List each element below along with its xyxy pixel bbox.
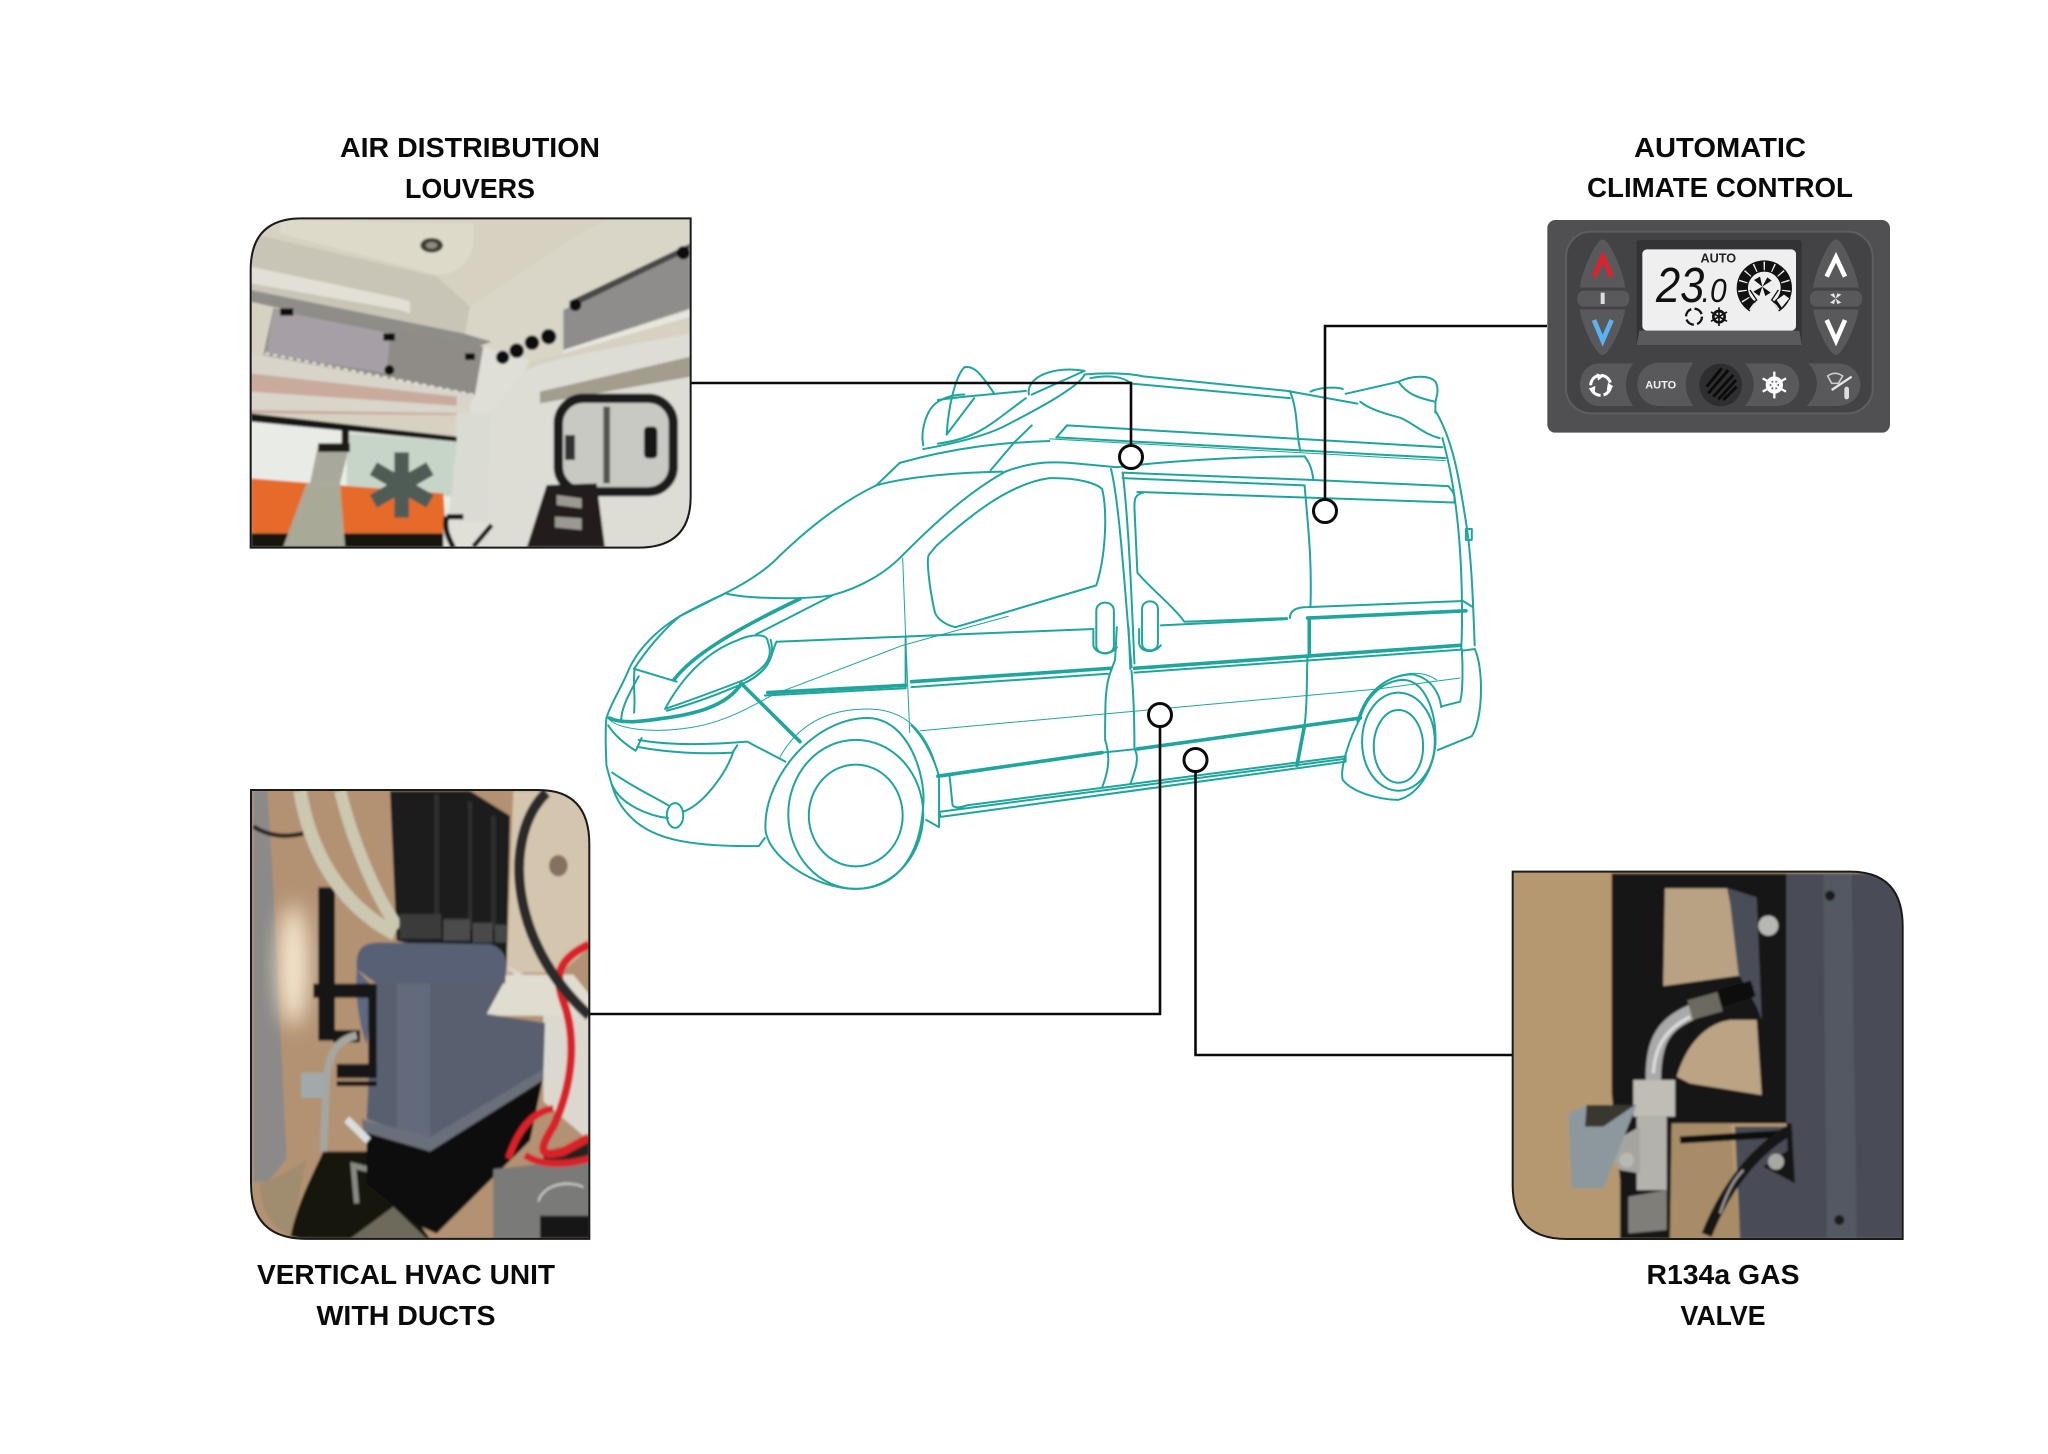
heading: vertical HVAC unit with ducts: WITH DUCTS xyxy=(316,1300,496,1331)
connector: climate control to van xyxy=(1314,326,1547,522)
van rear wheel xyxy=(1342,674,1441,800)
heading: R134a gas valve xyxy=(1646,1259,1800,1331)
connector: HVAC unit to van xyxy=(589,704,1172,1014)
LCD screen: AUTO xyxy=(1701,251,1736,265)
van body: doors and windows xyxy=(903,469,1473,787)
heading: automatic climate control xyxy=(1587,132,1853,203)
heading: R134a gas valve: VALVE xyxy=(1680,1300,1766,1331)
inner bezel xyxy=(1566,232,1873,413)
LCD screen: 23 xyxy=(1655,258,1704,313)
heading: vertical HVAC unit with ducts: VERTICAL HVAC UNIT xyxy=(257,1259,555,1290)
heading: air distribution louvers xyxy=(340,132,600,204)
temperature sensor grille xyxy=(1699,364,1742,406)
connector: gas valve to van xyxy=(1184,748,1513,1055)
button: AUTO: AUTO xyxy=(1645,380,1677,392)
heading: automatic climate control: CLIMATE CONTROL xyxy=(1587,172,1853,203)
floor and lower-left hoses xyxy=(290,1151,430,1239)
heading: air distribution louvers: AIR DISTRIBUTION xyxy=(340,132,600,163)
panel: climate control unit xyxy=(1547,220,1890,433)
button: fan up/down xyxy=(1810,239,1862,355)
van body: front end and hood xyxy=(606,593,1008,846)
heading: air distribution louvers: LOUVERS xyxy=(405,173,535,204)
LCD screen xyxy=(1642,249,1796,331)
button: temperature up/down xyxy=(1577,239,1629,355)
button: A/C snowflake xyxy=(1745,363,1799,406)
LCD recess lower lip xyxy=(1637,331,1802,345)
photo panel: vertical HVAC unit xyxy=(247,787,593,1244)
button: AUTO xyxy=(1637,363,1693,406)
LCD recess xyxy=(1637,240,1802,345)
button: defrost xyxy=(1807,363,1860,406)
heading: R134a gas valve: R134a GAS xyxy=(1646,1259,1800,1290)
van front wheel xyxy=(765,709,939,889)
van body: belt lines and sills xyxy=(747,619,1460,817)
control housing xyxy=(1547,220,1890,433)
connector: louvers to van xyxy=(691,383,1142,468)
LCD screen: .0 xyxy=(1702,273,1727,310)
heading: automatic climate control: AUTOMATIC xyxy=(1634,132,1806,163)
van body: windshield and roof xyxy=(727,367,1455,598)
van line drawing xyxy=(606,367,1481,889)
van body: rear edge xyxy=(1435,411,1481,750)
button: recirculation xyxy=(1580,363,1633,406)
photo panel: air distribution louvers xyxy=(247,215,693,552)
heading: vertical HVAC unit with ducts xyxy=(257,1259,555,1331)
photo panel: R134a gas valve xyxy=(1510,868,1907,1242)
